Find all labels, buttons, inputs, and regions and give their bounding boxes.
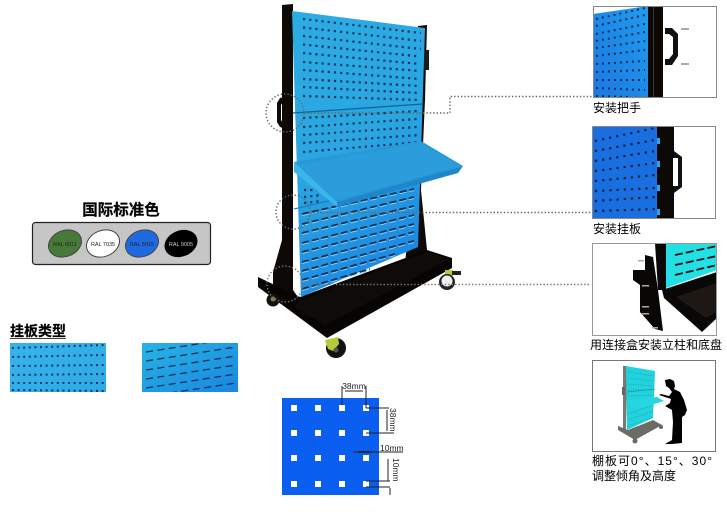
- peg holes upper: [303, 19, 421, 100]
- mini rack base: [618, 420, 662, 440]
- base frame: [258, 250, 452, 338]
- swatch: RAL 9005: RAL 9005: [169, 242, 193, 248]
- thumbnail: handle install: [593, 6, 717, 98]
- dimension lines: [342, 386, 403, 495]
- column: [655, 243, 666, 290]
- peg holes lower: [303, 111, 420, 152]
- swatch: RAL 7035: [82, 225, 124, 262]
- label: shelf angle line 1: 棚板可0°、15°、30°: [592, 453, 712, 468]
- hole spacing diagram: [282, 381, 404, 495]
- label: 10mm vertical: 10mm: [391, 458, 401, 482]
- swatch: RAL 6011: [44, 225, 86, 262]
- louver slot highlights: [302, 190, 414, 290]
- cyan panel: [666, 243, 717, 288]
- louver slots: [302, 189, 414, 289]
- caster front: [325, 337, 346, 358]
- main rack product photo: [258, 4, 463, 358]
- left post and foot: [273, 4, 300, 308]
- shelf: [294, 141, 463, 207]
- rear handle on right post: [424, 50, 429, 70]
- peg holes under shelf: [304, 190, 322, 203]
- heading: panel types: 挂板类型: [10, 323, 66, 339]
- thumbnail: connector box: [592, 243, 717, 336]
- square holes: [291, 405, 369, 487]
- swatch: RAL 6011: RAL 6011: [53, 242, 77, 248]
- right post and foot: [405, 25, 427, 262]
- thumbnail: panel install: [592, 126, 716, 219]
- swatch: RAL 9005: [160, 225, 202, 262]
- label: 10mm horizontal: 10mm: [380, 443, 404, 453]
- connector plate: [633, 255, 663, 331]
- front handle: [277, 95, 291, 131]
- caster right: [439, 270, 461, 290]
- label: install handle: 安装把手: [593, 100, 641, 115]
- blue plate: [282, 398, 379, 495]
- callout: base ring and leader: [267, 266, 590, 302]
- thumbnail: operator using rack: [592, 360, 716, 452]
- base tray: [662, 272, 717, 332]
- swatch: RAL 7035: RAL 7035: [91, 242, 115, 248]
- label: connector box: 用连接盒安装立柱和底盘: [590, 337, 722, 352]
- mini rack shelf: [627, 397, 664, 410]
- person silhouette: [659, 379, 687, 444]
- heading: standard colours: 国际标准色: [82, 200, 160, 219]
- callout: panel ring and leader: [276, 195, 592, 229]
- label: 38mm horizontal: 38mm: [342, 381, 366, 391]
- panel seams: [293, 104, 423, 113]
- colour swatch panel: [32, 222, 210, 264]
- mini rack panel: [626, 366, 655, 430]
- label: 38mm vertical: 38mm: [388, 408, 398, 432]
- panel type: pegboard sample: [10, 343, 106, 392]
- pegboard panel: [292, 11, 425, 297]
- label: install panel: 安装挂板: [593, 221, 641, 236]
- label: shelf angle line 2: 调整倾角及高度: [592, 468, 676, 483]
- callout: handle ring and leader: [266, 94, 592, 132]
- swatch: RAL 5015: RAL 5015: [130, 242, 154, 248]
- swatch: RAL 5015: [121, 225, 163, 262]
- panel type: louvered sample: [142, 338, 238, 393]
- mini rack post: [623, 366, 627, 430]
- caster left: [266, 294, 280, 306]
